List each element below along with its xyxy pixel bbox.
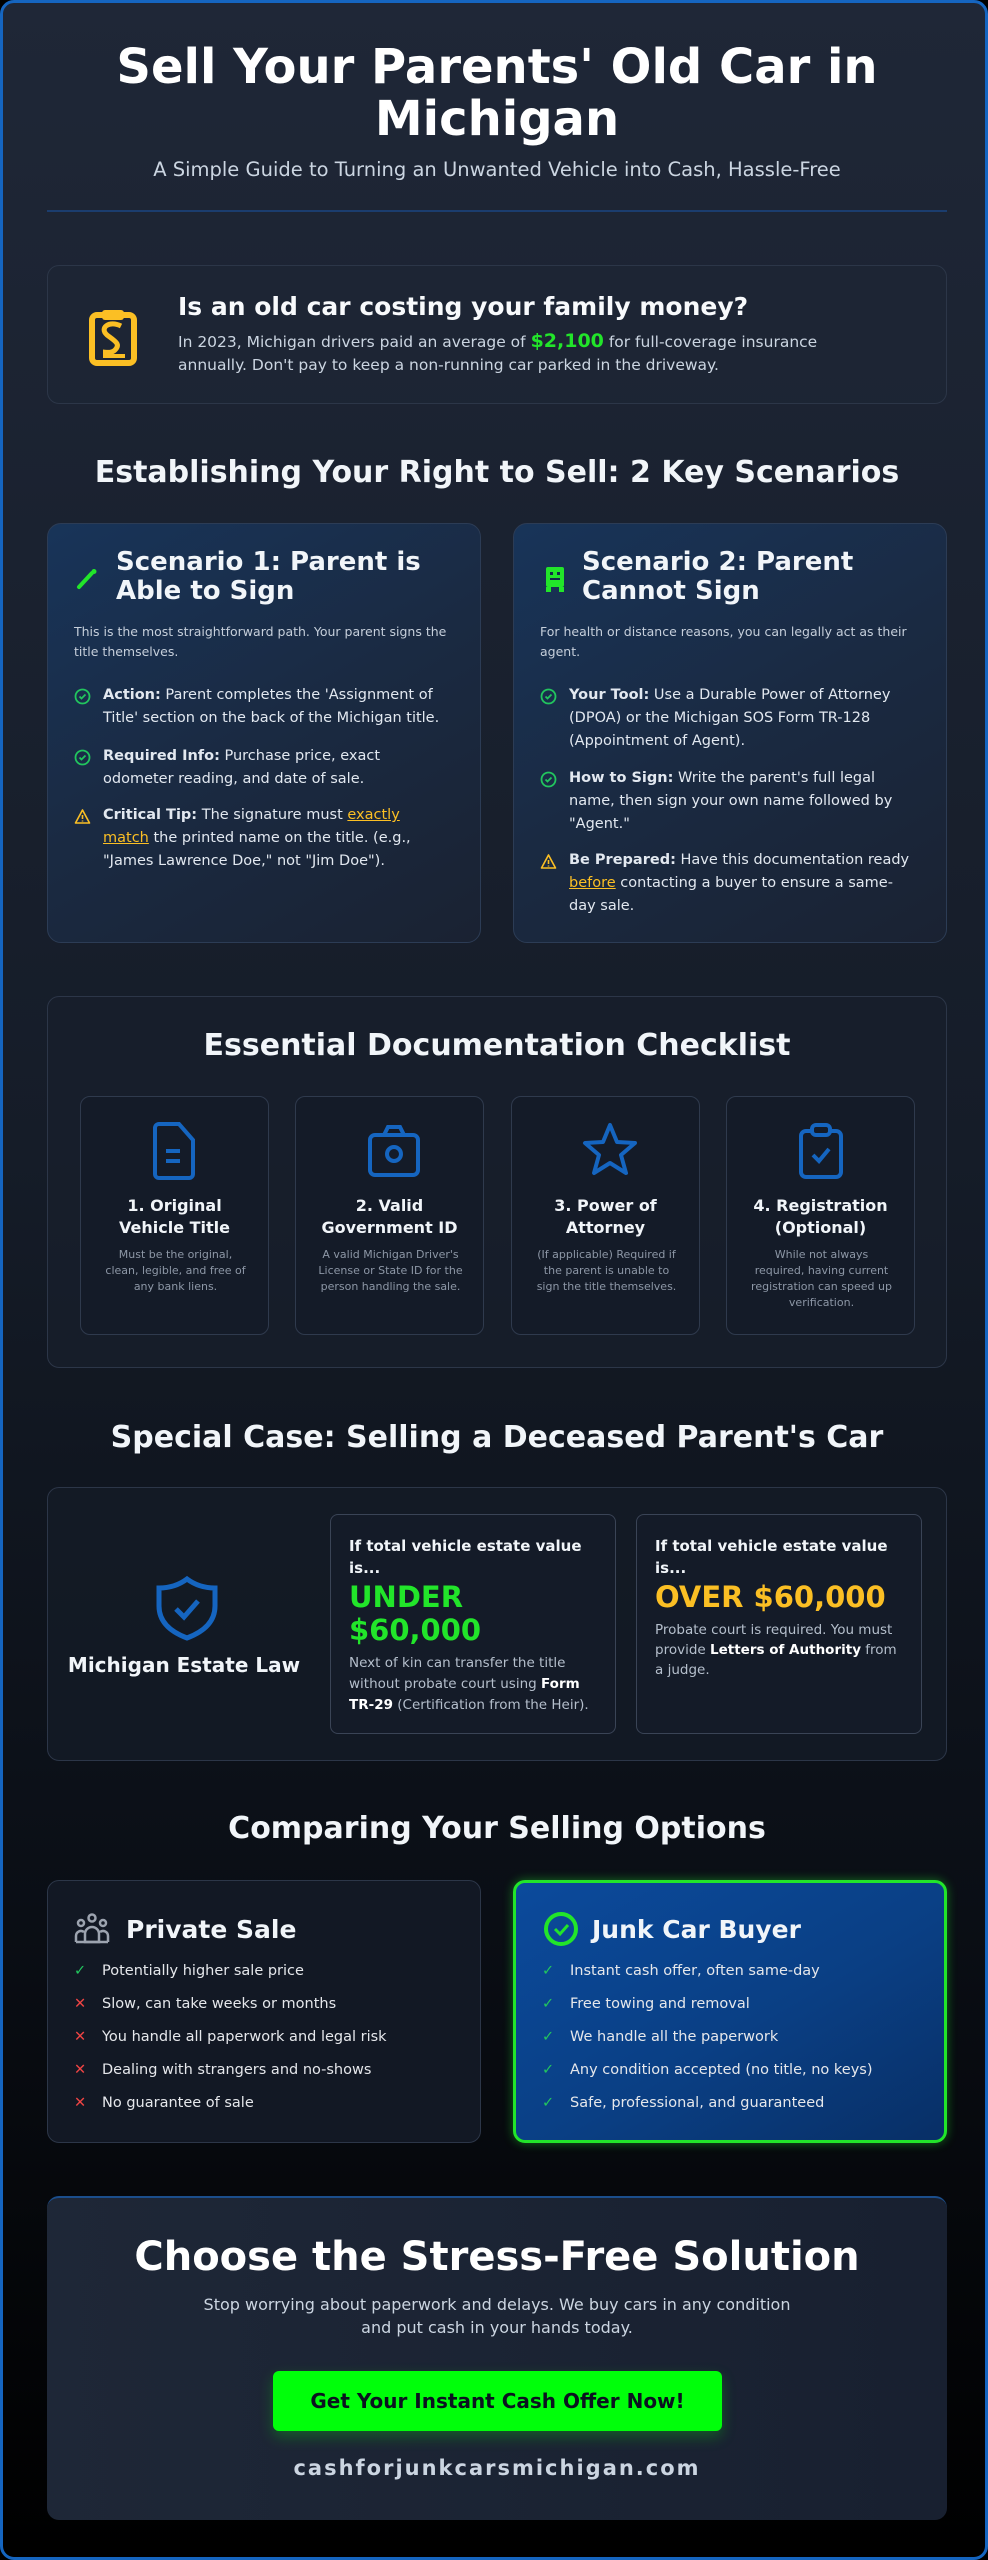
panel: junk car buyer: ✓ <box>542 2029 554 2045</box>
panel: call to action <box>47 2196 947 2520</box>
text: url: cashforjunkcarsmichigan.com <box>293 2456 701 2480</box>
item: how to sign: How to Sign: Write the parent's full legal name, then sign your own name followed by "Agent." <box>569 770 892 832</box>
panel: junk car buyer: We handle all the paperwork <box>570 2029 778 2045</box>
panel: junk car buyer: Any condition accepted (no title, no keys) <box>570 2062 872 2078</box>
heading: cta: Choose the Stress-Free Solution <box>134 2234 860 2280</box>
heading: scenario 1: Scenario 1: Parent is <box>116 547 421 577</box>
card: title: 1. Original <box>127 1196 222 1215</box>
item: required info: Required Info: Purchase price, exact odometer reading, and date of sale. <box>103 748 380 787</box>
icon: pencil <box>76 569 96 590</box>
panel: scenario 2 <box>513 523 947 943</box>
card: registration: 4. Registration <box>753 1196 888 1215</box>
card: title: Must be the original, clean, legible, and free of any bank liens. <box>105 1248 246 1293</box>
panel: private sale: Slow, can take weeks or months <box>102 1996 336 2012</box>
card: over 60000: Probate court is required. You must provide Letters of Authority from a judge. <box>655 1622 897 1678</box>
title: Sell Your Parents' Old Car in <box>116 39 878 95</box>
icon: money clipboard <box>89 310 137 366</box>
card: id: 2. Valid <box>356 1196 423 1215</box>
heading: private sale: Private Sale <box>126 1915 296 1944</box>
card: registration <box>726 1096 915 1335</box>
text: intro 1: This is the most straightforward path. Your parent signs the title themselves. <box>74 624 446 659</box>
icon: people <box>74 1913 110 1944</box>
panel: scenario 1 <box>47 523 481 943</box>
card: under 60000 <box>330 1514 616 1734</box>
card: id: A valid Michigan Driver's License or State ID for the person handling the sale. <box>318 1248 463 1293</box>
title <box>116 39 878 147</box>
panel: private sale: ✕ <box>74 2029 86 2045</box>
card: under 60000: If total vehicle estate value is... <box>349 1537 582 1577</box>
label: michigan estate law: Michigan Estate Law <box>68 1653 300 1677</box>
text: intro 2: For health or distance reasons, you can legally act as their agent. <box>540 624 907 659</box>
heading: checklist: Essential Documentation Checklist <box>204 1028 790 1063</box>
button: cash offer <box>273 2371 722 2431</box>
card: registration: (Optional) <box>775 1218 866 1237</box>
heading: scenario 1 <box>116 547 421 606</box>
panel: cost callout <box>47 265 947 404</box>
text: cta: and put cash in your hands today. <box>361 2318 633 2337</box>
panel: junk car buyer: ✓ <box>542 2062 554 2078</box>
panel: private sale: ✕ <box>74 2095 86 2111</box>
card: power of attorney: (If applicable) Required if the parent is unable to sign the title themselves. <box>537 1248 676 1293</box>
heading: special case: Special Case: Selling a Deceased Parent's Car <box>111 1420 883 1455</box>
item: be prepared: Be Prepared: Have this documentation ready before contacting a buyer to ensure a same-day sale. <box>569 852 909 914</box>
panel: private sale: ✓ <box>74 1963 86 1979</box>
text: cta <box>204 2295 790 2337</box>
panel: junk car buyer: ✓ <box>542 1963 554 1979</box>
card: power of attorney: Attorney <box>566 1218 645 1237</box>
panel: junk car buyer: Safe, professional, and guaranteed <box>570 2095 824 2111</box>
panel: private sale: No guarantee of sale <box>102 2095 254 2111</box>
heading: scenario 2: Scenario 2: Parent <box>582 547 853 577</box>
panel: junk car buyer: ✓ <box>542 1996 554 2012</box>
icon: shield <box>156 1576 218 1641</box>
item: your tool: Your Tool: Use a Durable Power of Attorney (DPOA) or the Michigan SOS Form TR-128 (Appointment of Agent). <box>569 687 890 749</box>
card: under 60000: UNDER <box>349 1580 463 1614</box>
panel: documentation checklist <box>47 996 947 1368</box>
card: id <box>295 1096 484 1335</box>
panel: estate law <box>47 1487 947 1761</box>
text: cost: In 2023, Michigan drivers paid an average of $2,100 for full-coverage insurance annually. Don't pay to keep a non-running car parked in the driveway. <box>178 330 817 374</box>
panel: private sale: Potentially higher sale price <box>102 1963 304 1979</box>
button: cash offer: Get Your Instant Cash Offer Now! <box>310 2389 685 2413</box>
card: id: Government ID <box>321 1218 458 1237</box>
card: over 60000 <box>636 1514 922 1734</box>
panel: private sale: Dealing with strangers and no-shows <box>102 2062 371 2078</box>
panel: junk car buyer: Free towing and removal <box>570 1996 750 2012</box>
heading: scenarios: Establishing Your Right to Sell: 2 Key Scenarios <box>95 455 899 490</box>
card: under 60000: $60,000 <box>349 1613 481 1647</box>
panel: private sale <box>47 1880 481 2143</box>
card: registration: While not always required, having current registration can speed up verification. <box>751 1248 892 1309</box>
icon: building <box>546 567 564 592</box>
item: action: Action: Parent completes the 'Assignment of Title' section on the back of the Michigan title. <box>103 687 439 726</box>
heading: scenario 2 <box>582 547 853 606</box>
card: over 60000: If total vehicle estate value is... <box>655 1537 888 1577</box>
card: under 60000: Next of kin can transfer the title without probate court using Form TR-29 (Certification from the Heir). <box>349 1655 589 1713</box>
item: critical tip: Critical Tip: The signature must exactly match the printed name on the title. (e.g., "James Lawrence Doe," not "Jim Doe"). <box>103 807 411 869</box>
card: over 60000: OVER $60,000 <box>655 1580 886 1614</box>
panel: private sale: You handle all paperwork and legal risk <box>102 2029 387 2045</box>
panel: junk car buyer <box>513 1880 947 2143</box>
card: power of attorney <box>511 1096 700 1335</box>
card: title: Vehicle Title <box>119 1218 230 1237</box>
icon: check circle <box>544 1912 578 1946</box>
panel: private sale: ✕ <box>74 2062 86 2078</box>
heading: cost: Is an old car costing your family money? <box>178 292 748 321</box>
heading: scenario 2: Cannot Sign <box>582 576 760 606</box>
panel: private sale: ✕ <box>74 1996 86 2012</box>
heading: junk car buyer: Junk Car Buyer <box>592 1915 801 1944</box>
heading: comparing: Comparing Your Selling Options <box>228 1811 766 1846</box>
card: title <box>80 1096 269 1335</box>
card: power of attorney: 3. Power of <box>554 1196 657 1215</box>
text: cta: Stop worrying about paperwork and delays. We buy cars in any condition <box>204 2295 790 2314</box>
panel: junk car buyer: Instant cash offer, often same-day <box>570 1963 820 1979</box>
panel: junk car buyer: ✓ <box>542 2095 554 2111</box>
heading: scenario 1: Able to Sign <box>116 576 294 606</box>
subtitle: A Simple Guide to Turning an Unwanted Vehicle into Cash, Hassle-Free <box>153 158 841 181</box>
title: Michigan <box>375 91 619 147</box>
